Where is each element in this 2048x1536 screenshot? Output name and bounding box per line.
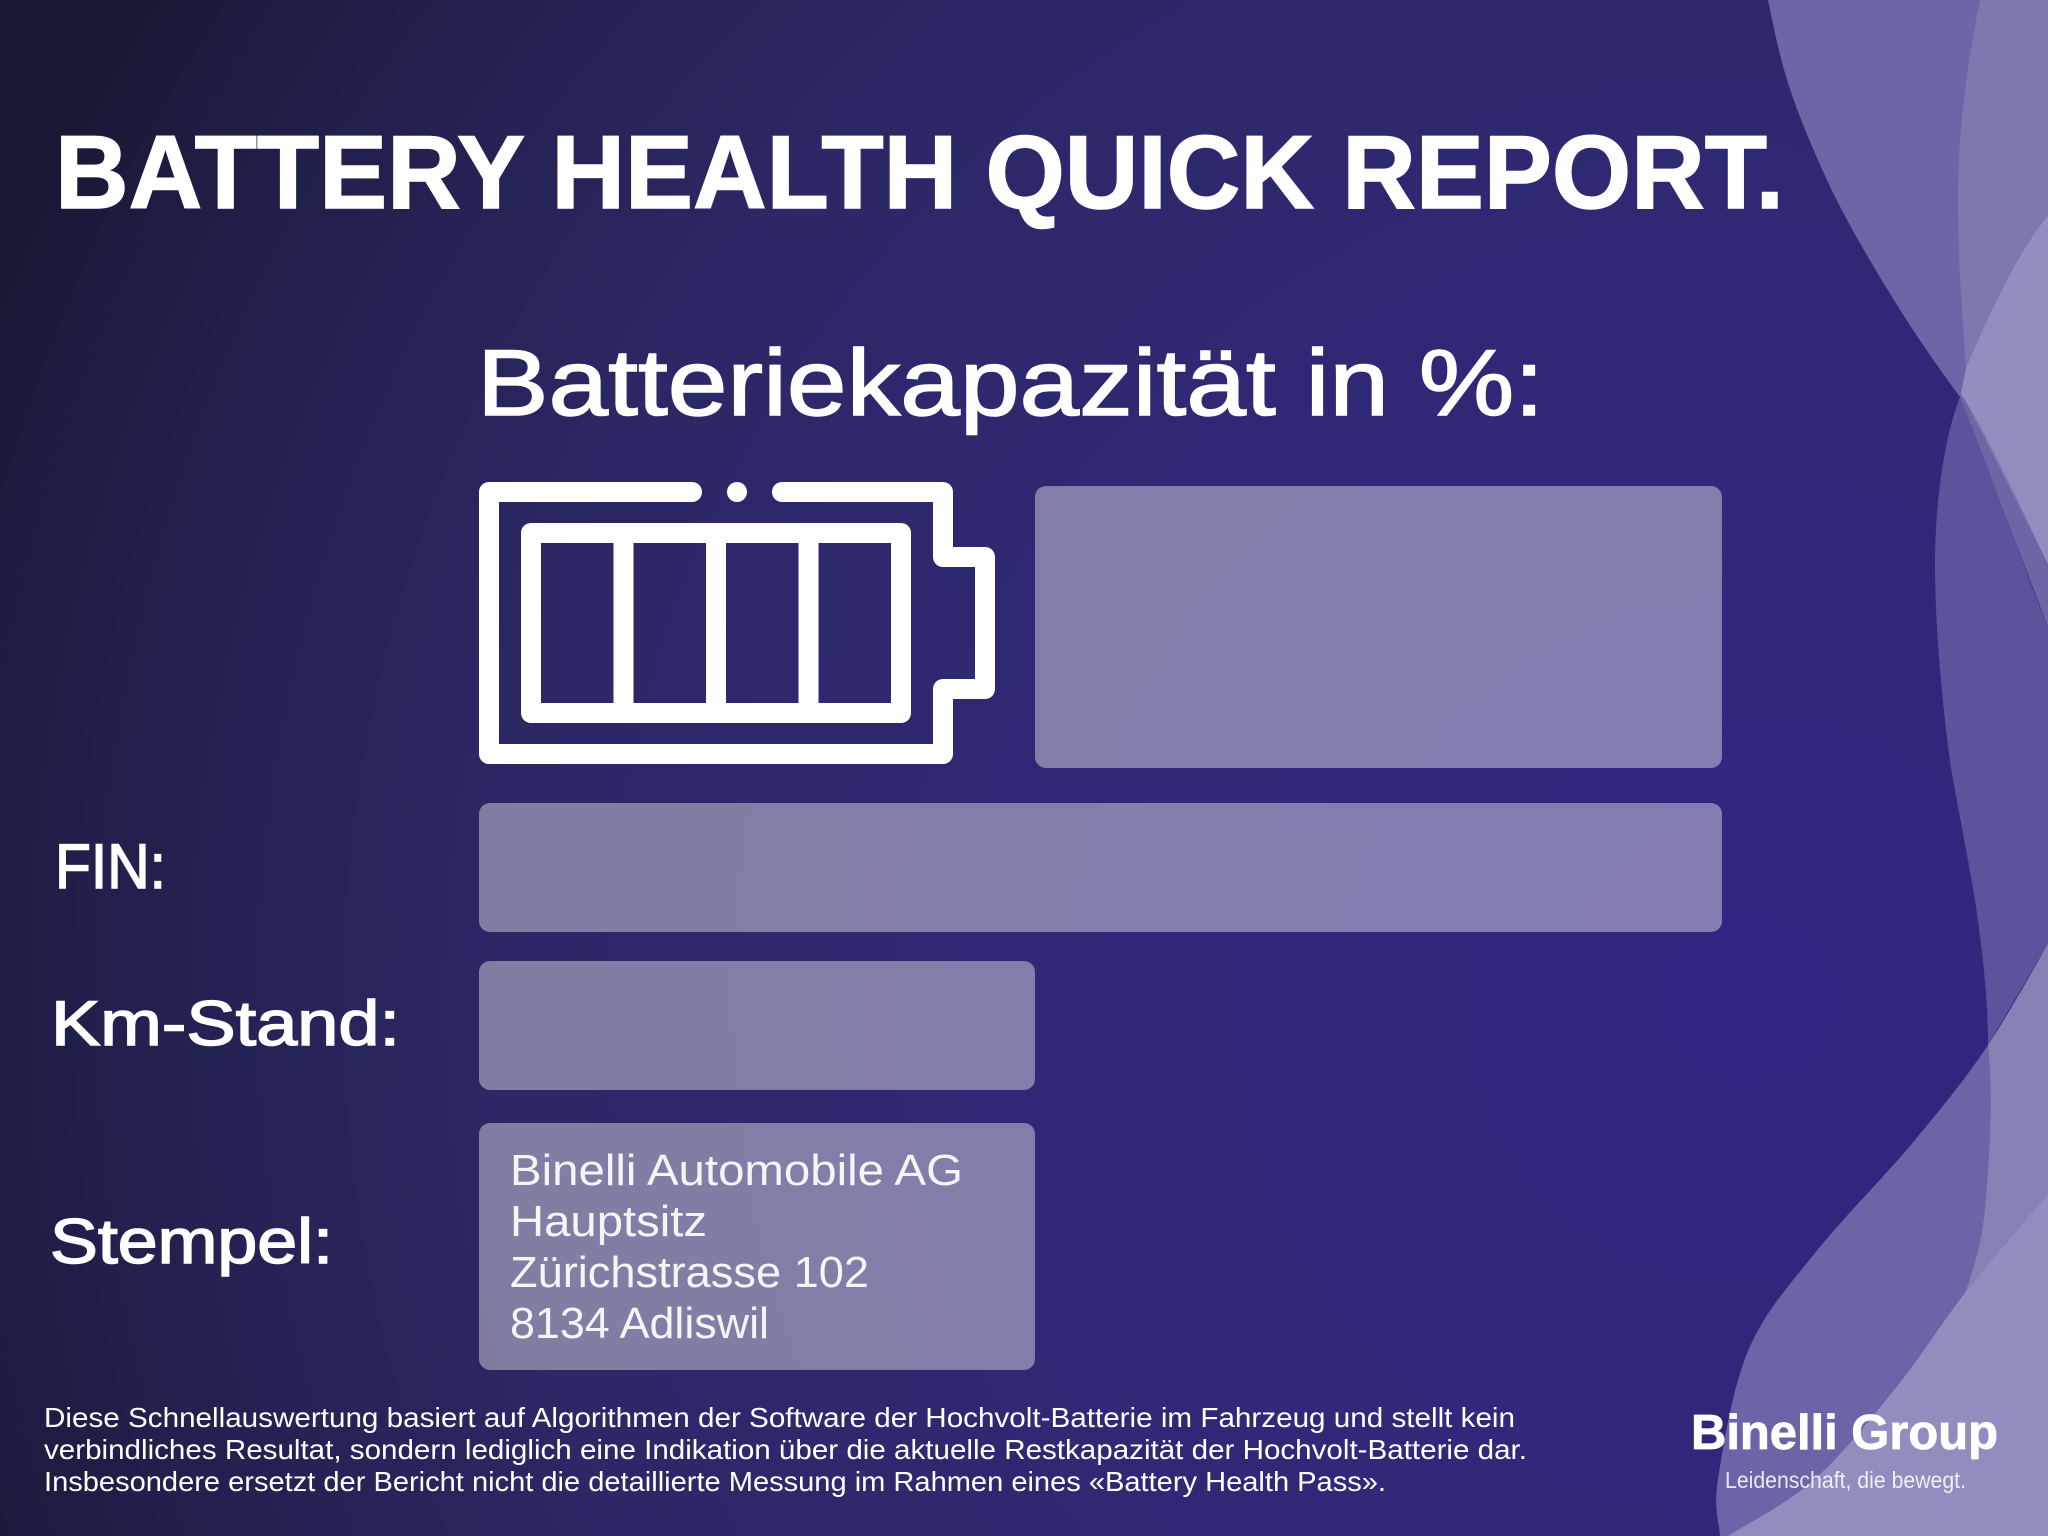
heading: battery capacity: Batteriekapazität in %: [477, 330, 1544, 435]
stamp address text: Binelli Automobile AG [510, 1146, 963, 1195]
panel: stamp field [479, 1123, 1035, 1370]
disclaimer text [44, 1402, 1527, 1497]
stamp address text: 8134 Adliswil [510, 1299, 769, 1348]
stamp address text: Zürichstrasse 102 [510, 1248, 869, 1297]
stamp address text [510, 1146, 963, 1348]
panel: FIN field [479, 803, 1722, 932]
label: Stempel: Stempel: [50, 1207, 333, 1277]
panel: capacity value field [1035, 486, 1722, 768]
label: Km-Stand: Km-Stand: [51, 989, 400, 1059]
decorative waves [1716, 0, 2048, 1536]
label: FIN: FIN: [55, 832, 166, 902]
disclaimer text: verbindliches Resultat, sondern lediglich eine Indikation über die aktuelle Restkapazität der Hochvolt-Batterie dar. [44, 1434, 1527, 1465]
panel: Km-Stand field [479, 961, 1035, 1090]
disclaimer text: Diese Schnellauswertung basiert auf Algorithmen der Software der Hochvolt-Batterie im Fahrzeug und stellt kein [44, 1402, 1515, 1433]
stamp address text: Hauptsitz [510, 1197, 707, 1246]
title: BATTERY HEALTH QUICK REPORT. [55, 115, 1784, 231]
tagline: Leidenschaft, die bewegt. [1725, 1467, 1966, 1493]
icon: battery [489, 482, 985, 754]
logo: Binelli Group: Binelli Group [1691, 1406, 1998, 1460]
disclaimer text: Insbesondere ersetzt der Bericht nicht die detaillierte Messung im Rahmen eines «Battery Health Pass». [44, 1466, 1386, 1497]
logo: Binelli Group [1691, 1406, 1998, 1493]
